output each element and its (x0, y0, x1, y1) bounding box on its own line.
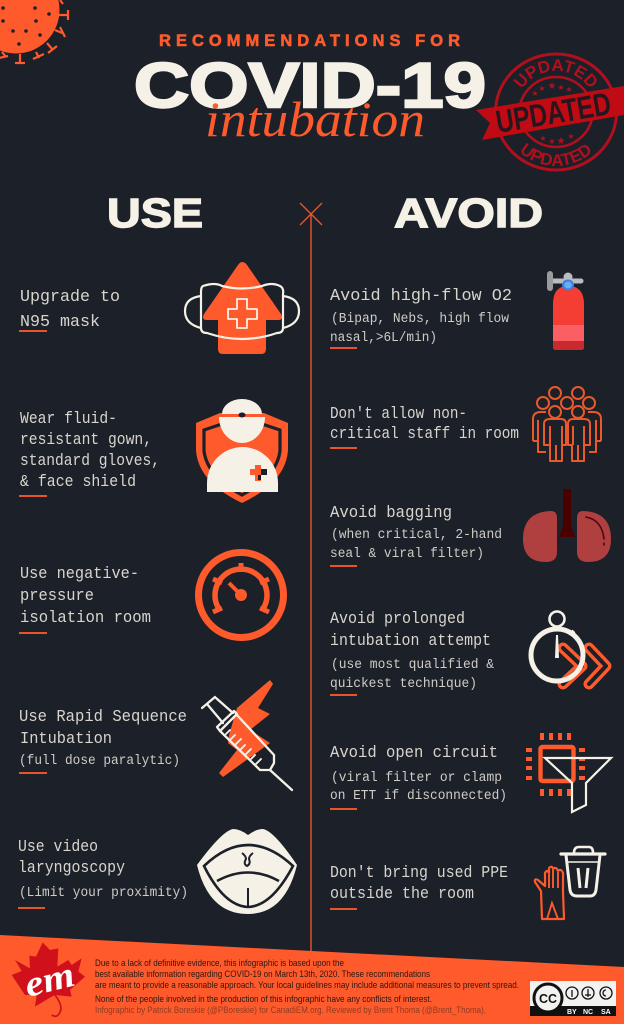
text: disclaimer (95, 957, 519, 1015)
badge: creative commons: NC (583, 1009, 593, 1016)
panel: use column (18, 262, 299, 914)
item: non-critical staff text (330, 404, 519, 449)
text: disclaimer: best available information regarding COVID-19 on March 13th, 2020. These recommendations (95, 968, 430, 979)
icon: shield and clinician (196, 399, 288, 503)
item: non-critical staff text: Don't allow non- (330, 404, 467, 423)
item: prolonged intubation text (330, 609, 494, 696)
item: bagging text: seal & viral filter) (330, 547, 484, 562)
panel: footer (0, 935, 624, 1024)
item: open circuit text: (viral filter or clamp (331, 771, 502, 786)
item: used PPE text: Don't bring used PPE (330, 863, 508, 882)
item: gown text: standard gloves, (20, 451, 160, 470)
icon: pressure gauge (198, 552, 284, 638)
item: gown text: resistant gown, (20, 430, 152, 449)
item: used PPE text: outside the room (330, 884, 474, 903)
icon: arrow and mask (185, 262, 299, 354)
item: gown text: Wear fluid- (20, 409, 117, 428)
text: disclaimer: are meant to provide a reasonable approach. Your local guidelines may include additional measures to prevent spread. (95, 979, 519, 990)
item: open circuit text (330, 743, 507, 810)
item: RSI text: Intubation (20, 729, 112, 748)
item: video laryngoscopy text: (Limit your proximity) (19, 886, 188, 901)
item: used PPE text (330, 863, 508, 910)
item: RSI text: (full dose paralytic) (19, 754, 180, 769)
text: disclaimer: None of the people involved in the production of this infographic have any conflicts of interest. (95, 993, 432, 1004)
item: video laryngoscopy text (18, 837, 188, 909)
item: gown text: & face shield (20, 472, 136, 491)
stamp: updated: ★ (538, 84, 546, 93)
item: bagging text: (when critical, 2-hand (331, 528, 502, 543)
title (134, 32, 486, 147)
item: video laryngoscopy text: Use video (18, 837, 98, 856)
icon: crowd of staff (533, 387, 601, 461)
stamp: updated: ★ (548, 81, 557, 92)
item: gown text (19, 409, 160, 497)
heading: avoid: AVOID (394, 190, 543, 236)
badge: creative commons: CC (539, 991, 558, 1006)
item: N95 mask text (19, 287, 120, 332)
badge: creative commons (530, 981, 616, 1016)
item: negative pressure text: Use negative- (20, 564, 139, 583)
icon: stopwatch and chevrons (531, 612, 606, 684)
icon: syringe and bolt (202, 680, 292, 790)
badge: creative commons: SA (601, 1009, 611, 1016)
item: prolonged intubation text: Avoid prolonged (330, 609, 465, 628)
item: high-flow text (330, 286, 512, 349)
stamp: updated: ★ (557, 83, 565, 92)
item: RSI text: Use Rapid Sequence (19, 707, 187, 726)
stamp: updated: ★ (567, 132, 575, 141)
item: video laryngoscopy text: laryngoscopy (18, 858, 125, 877)
stamp: updated: ★ (539, 134, 547, 143)
stamp: updated: ★ (557, 136, 566, 147)
stamp: updated (476, 52, 624, 172)
icon: chip and funnel (526, 733, 611, 812)
icon: oxygen tank (550, 272, 584, 350)
item: open circuit text: on ETT if disconnected) (330, 789, 507, 804)
heading: COVID-19: COVID-19 (134, 51, 486, 121)
item: prolonged intubation text: (use most qualified & (331, 658, 494, 673)
stamp: updated: ★ (565, 85, 573, 94)
icon: lungs (523, 489, 611, 562)
item: non-critical staff text: critical staff in room (330, 424, 519, 443)
item: high-flow text: (Bipap, Nebs, high flow (331, 312, 509, 327)
item: negative pressure text (19, 564, 151, 634)
heading: use: USE (107, 190, 203, 236)
logo: CanadiEM maple leaf: em (20, 954, 78, 1005)
item: bagging text: Avoid bagging (330, 503, 452, 522)
text: disclaimer: Infographic by Patrick Boreskie (@PBoreskie) for CanadiEM.org. Reviewed by Brent Thoma (@Brent_Thoma). (95, 1004, 486, 1015)
item: open circuit text: Avoid open circuit (330, 743, 498, 762)
item: negative pressure text: isolation room (20, 608, 151, 627)
stamp: updated: ★ (531, 89, 539, 98)
item: prolonged intubation text: intubation attempt (330, 631, 491, 650)
panel: avoid column (330, 272, 611, 919)
item: bagging text (330, 503, 502, 567)
item: high-flow text: nasal,>6L/min) (330, 331, 437, 346)
logo: CanadiEM maple leaf (12, 942, 85, 1016)
icon: glove and trash can (535, 847, 605, 919)
stamp: updated: UPDATED (514, 59, 597, 87)
stamp: updated: UPDATED (522, 143, 590, 166)
heading: intubation: intubation (205, 91, 425, 147)
icon: mouth (197, 829, 297, 914)
item: high-flow text: Avoid high-flow O2 (330, 286, 512, 305)
icon: virus (0, 0, 68, 63)
item: RSI text (19, 707, 187, 774)
badge: creative commons: BY (567, 1009, 577, 1016)
item: N95 mask text: N95 mask (20, 312, 100, 331)
item: negative pressure text: pressure (20, 586, 94, 605)
item: prolonged intubation text: quickest technique) (330, 677, 477, 692)
item: N95 mask text: Upgrade to (20, 287, 120, 306)
text: disclaimer: Due to a lack of definitive evidence, this infographic is based upon the (95, 957, 344, 968)
subtitle: recommendations for: RECOMMENDATIONS FOR (159, 32, 460, 50)
centre divider with cross (300, 203, 322, 951)
stamp: updated: ★ (548, 137, 556, 146)
